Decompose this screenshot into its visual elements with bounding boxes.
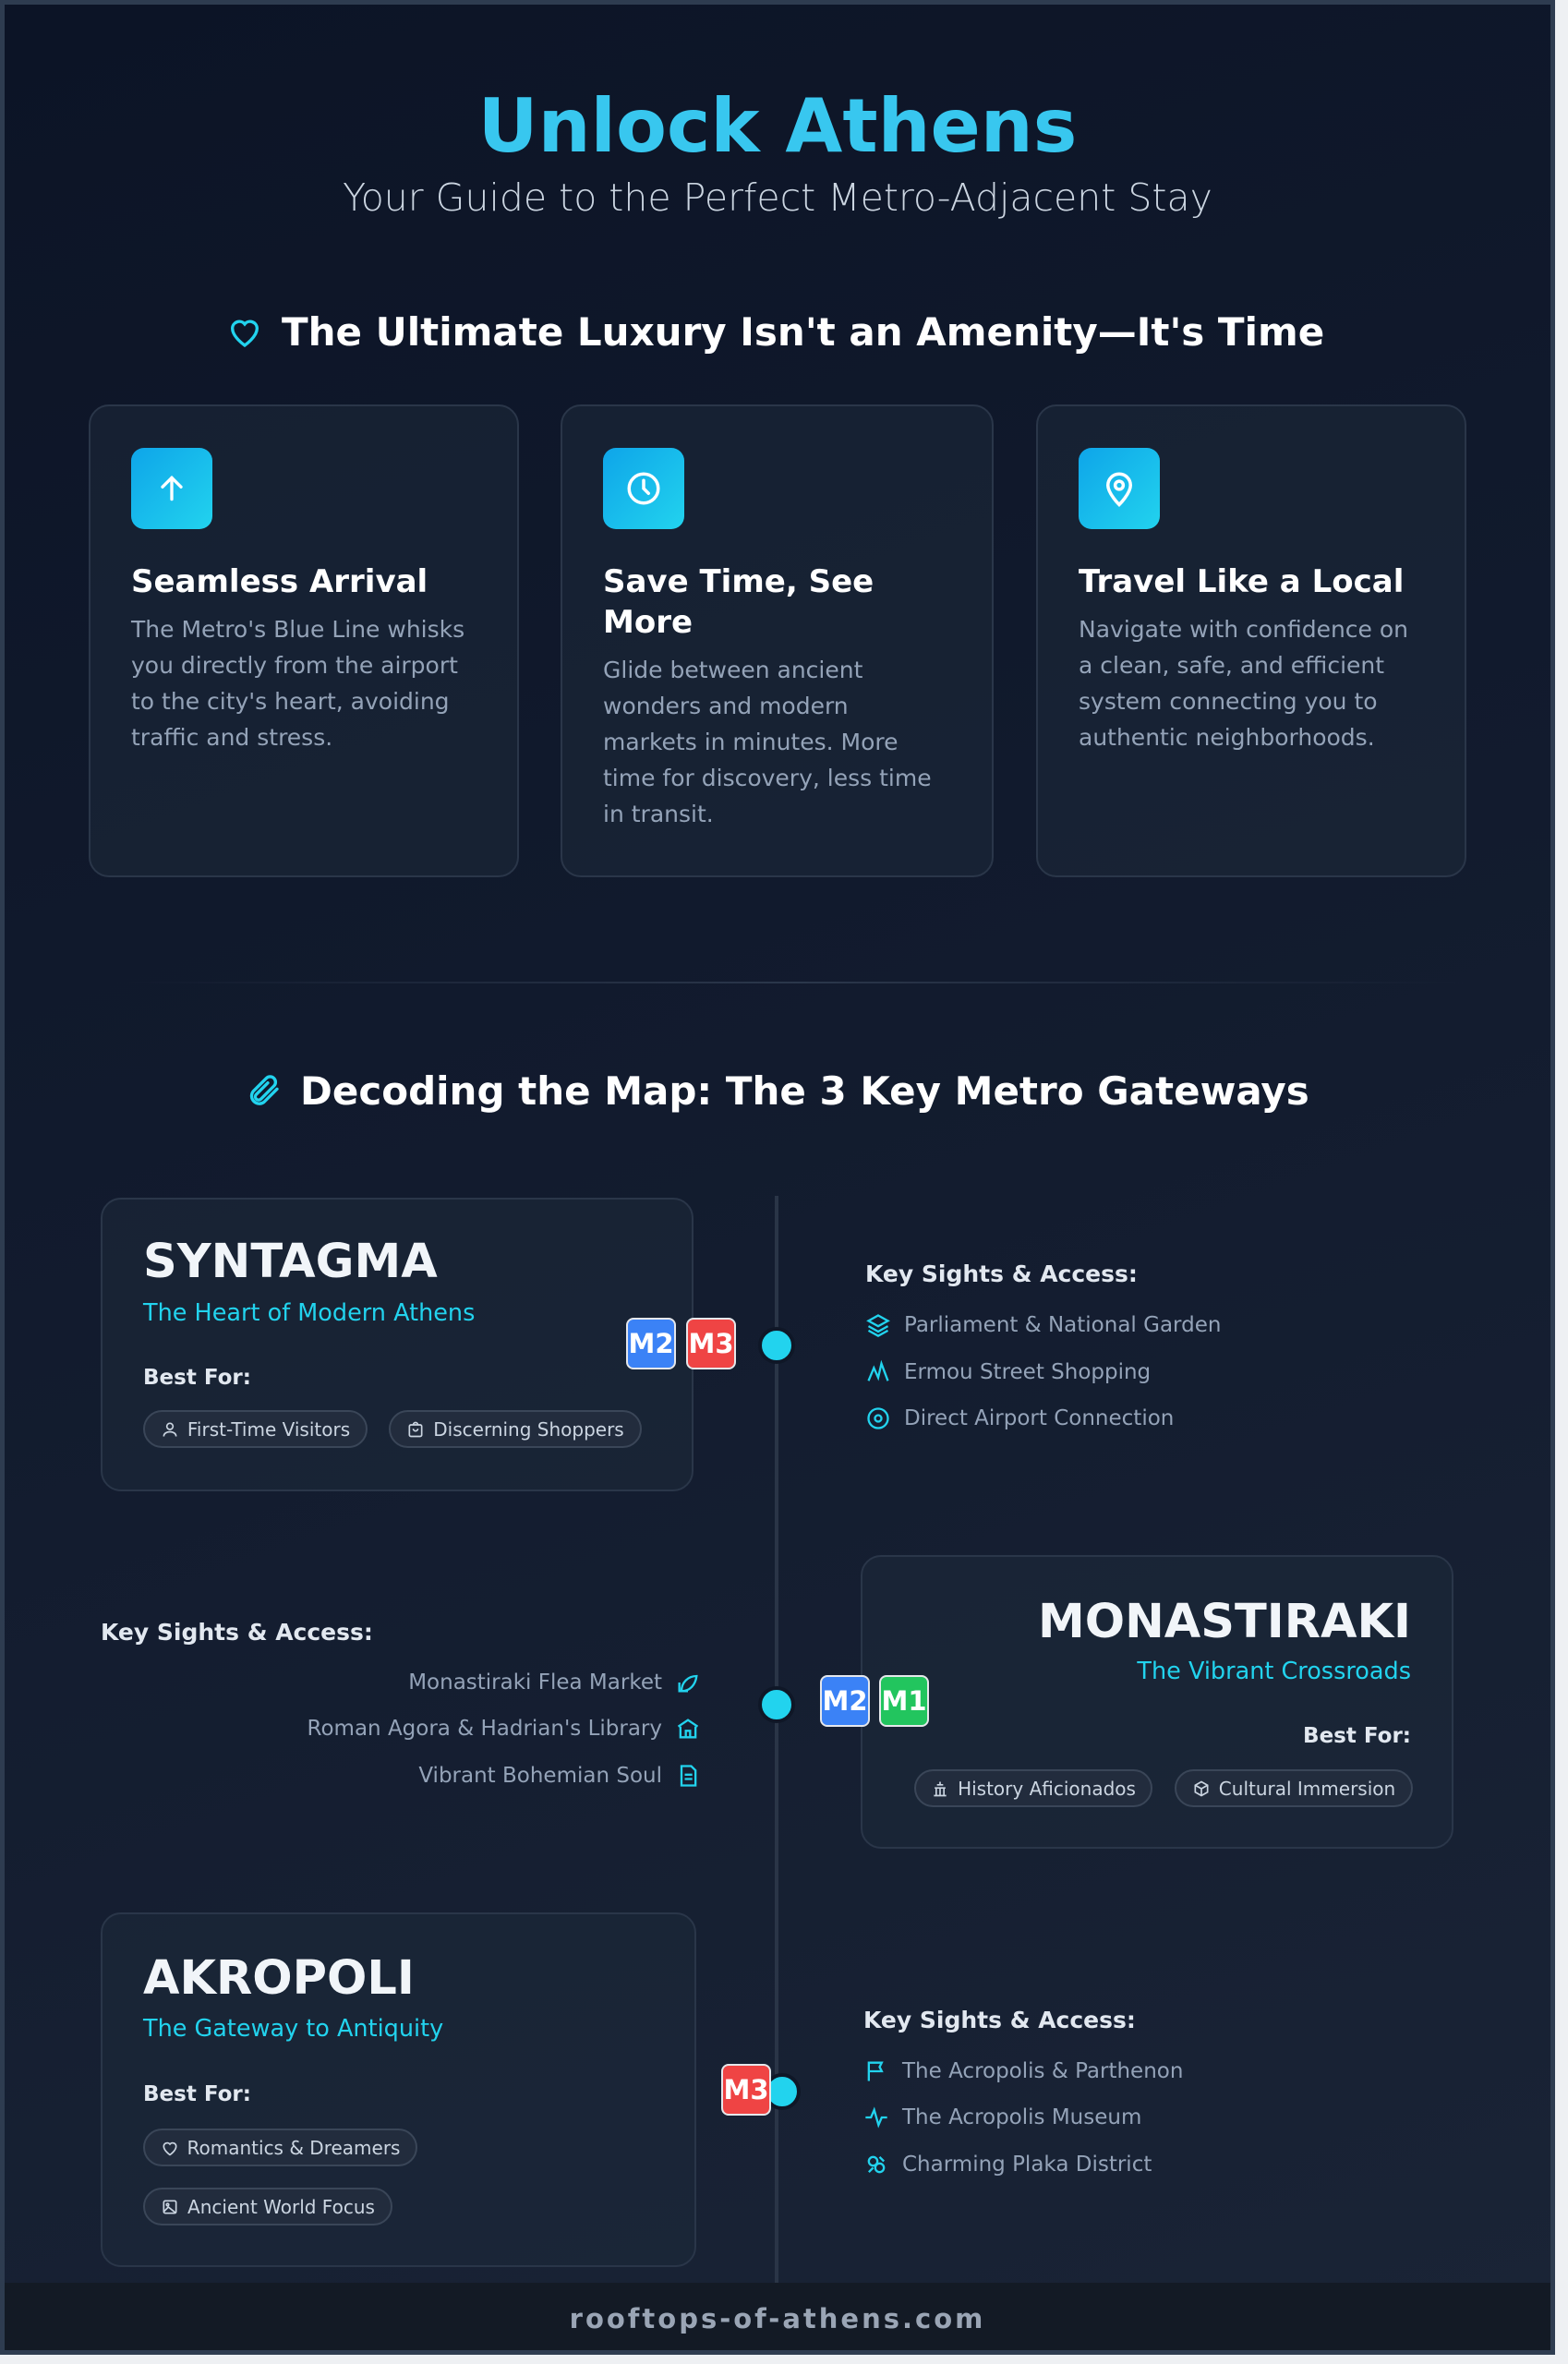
badges: M2 M1: M2: [822, 1685, 868, 1717]
key sights: syntagma: Key Sights & Access:: [865, 1260, 1138, 1287]
panel: seamless arrival: [89, 404, 519, 877]
best for: Best For:: [143, 1366, 251, 1390]
key sights: akropoli: The Acropolis Museum: [902, 2105, 1141, 2129]
card text: Glide between ancient wonders and modern markets in minutes. More time for discovery, less time in transit.: [603, 657, 932, 827]
timeline dot: [758, 1327, 795, 1364]
key sights: akropoli: Charming Plaka District: [902, 2153, 1152, 2177]
pill: discerning shoppers: Discerning Shoppers: [433, 1418, 624, 1441]
station name: MONASTIRAKI: [1038, 1595, 1411, 1649]
timeline line: [775, 1196, 778, 2286]
card text: Navigate with confidence on a clean, safe, and efficient system connecting you to authentic neighborhoods.: [1079, 616, 1408, 751]
key sights: monastiraki: Vibrant Bohemian Soul: [418, 1764, 662, 1788]
pill: ancient world: [143, 2188, 392, 2225]
key sights: syntagma: Ermou Street Shopping: [904, 1360, 1151, 1384]
icon: map pin: [1079, 448, 1160, 529]
badge: M3: M3: [723, 2074, 769, 2105]
badge: M3: [721, 2064, 771, 2116]
station name: AKROPOLI: [143, 1951, 415, 2006]
pill: discerning shoppers: [389, 1410, 642, 1448]
footer: [5, 2283, 1550, 2355]
pill: romantics: [143, 2129, 417, 2166]
badges: M2 M3: M3: [688, 1328, 734, 1359]
card text: The Metro's Blue Line whisks you directly from the airport to the city's heart, avoiding traffic and stress.: [131, 616, 464, 751]
subtitle: Your Guide to the Perfect Metro-Adjacent Stay: [343, 175, 1212, 220]
footer: rooftops-of-athens.com: [570, 2303, 985, 2334]
panel: akropoli: [101, 1912, 696, 2267]
key sights: monastiraki: Monastiraki Flea Market: [408, 1670, 662, 1695]
pill: history aficionados: History Aficionados: [958, 1777, 1136, 1799]
badges: M2 M1: [820, 1675, 929, 1727]
card title: Travel Like a Local: [1079, 563, 1404, 600]
panel: monastiraki: [861, 1555, 1453, 1849]
icon: heart: [231, 320, 259, 347]
station subtitle: The Heart of Modern Athens: [143, 1299, 475, 1327]
pill: romantics: Romantics & Dreamers: [187, 2137, 400, 2159]
pill: first-time visitors: [143, 1410, 368, 1448]
key sights: syntagma: [865, 1260, 1221, 1430]
icon: arrow up: [131, 448, 212, 529]
key sights: syntagma: Parliament & National Garden: [904, 1313, 1221, 1337]
best for: Best For:: [1303, 1724, 1411, 1748]
badges: M2 M1: M1: [881, 1685, 927, 1717]
pill: history aficionados: [914, 1769, 1152, 1807]
card title: Save Time, See More: [603, 563, 874, 641]
icon: paperclip: [249, 1075, 279, 1105]
station subtitle: The Gateway to Antiquity: [143, 2015, 443, 2043]
pill: cultural immersion: Cultural Immersion: [1219, 1777, 1395, 1799]
heading: decoding the map: Decoding the Map: The 3 Key Metro Gateways: [300, 1067, 1309, 1114]
key sights: akropoli: The Acropolis & Parthenon: [902, 2059, 1183, 2083]
timeline dot: [758, 1686, 795, 1723]
timeline dot: [764, 2073, 801, 2110]
title: Unlock Athens: [478, 83, 1077, 169]
key sights: syntagma: Direct Airport Connection: [904, 1406, 1174, 1430]
icon: clock: [603, 448, 684, 529]
panel: save time: [561, 404, 994, 877]
pill: ancient world: Ancient World Focus: [187, 2196, 375, 2218]
station name: SYNTAGMA: [143, 1235, 438, 1289]
best for: Best For:: [143, 2082, 251, 2106]
key sights: akropoli: [863, 2007, 1183, 2177]
key sights: monastiraki: [101, 1619, 698, 1788]
heading: ultimate luxury: The Ultimate Luxury Isn't an Amenity—It's Time: [282, 308, 1324, 355]
station subtitle: The Vibrant Crossroads: [1137, 1658, 1411, 1685]
badges: M2 M3: M2: [628, 1328, 674, 1359]
panel: travel like a local: [1036, 404, 1466, 877]
pill: cultural immersion: [1175, 1769, 1413, 1807]
pill: first-time visitors: First-Time Visitors: [187, 1418, 350, 1441]
key sights: akropoli: Key Sights & Access:: [863, 2007, 1136, 2033]
panel: syntagma: [101, 1198, 694, 1491]
key sights: monastiraki: Key Sights & Access:: [101, 1619, 373, 1646]
card title: Seamless Arrival: [131, 563, 428, 600]
badges: M2 M3: [626, 1318, 736, 1369]
key sights: monastiraki: Roman Agora & Hadrian's Library: [308, 1717, 662, 1741]
